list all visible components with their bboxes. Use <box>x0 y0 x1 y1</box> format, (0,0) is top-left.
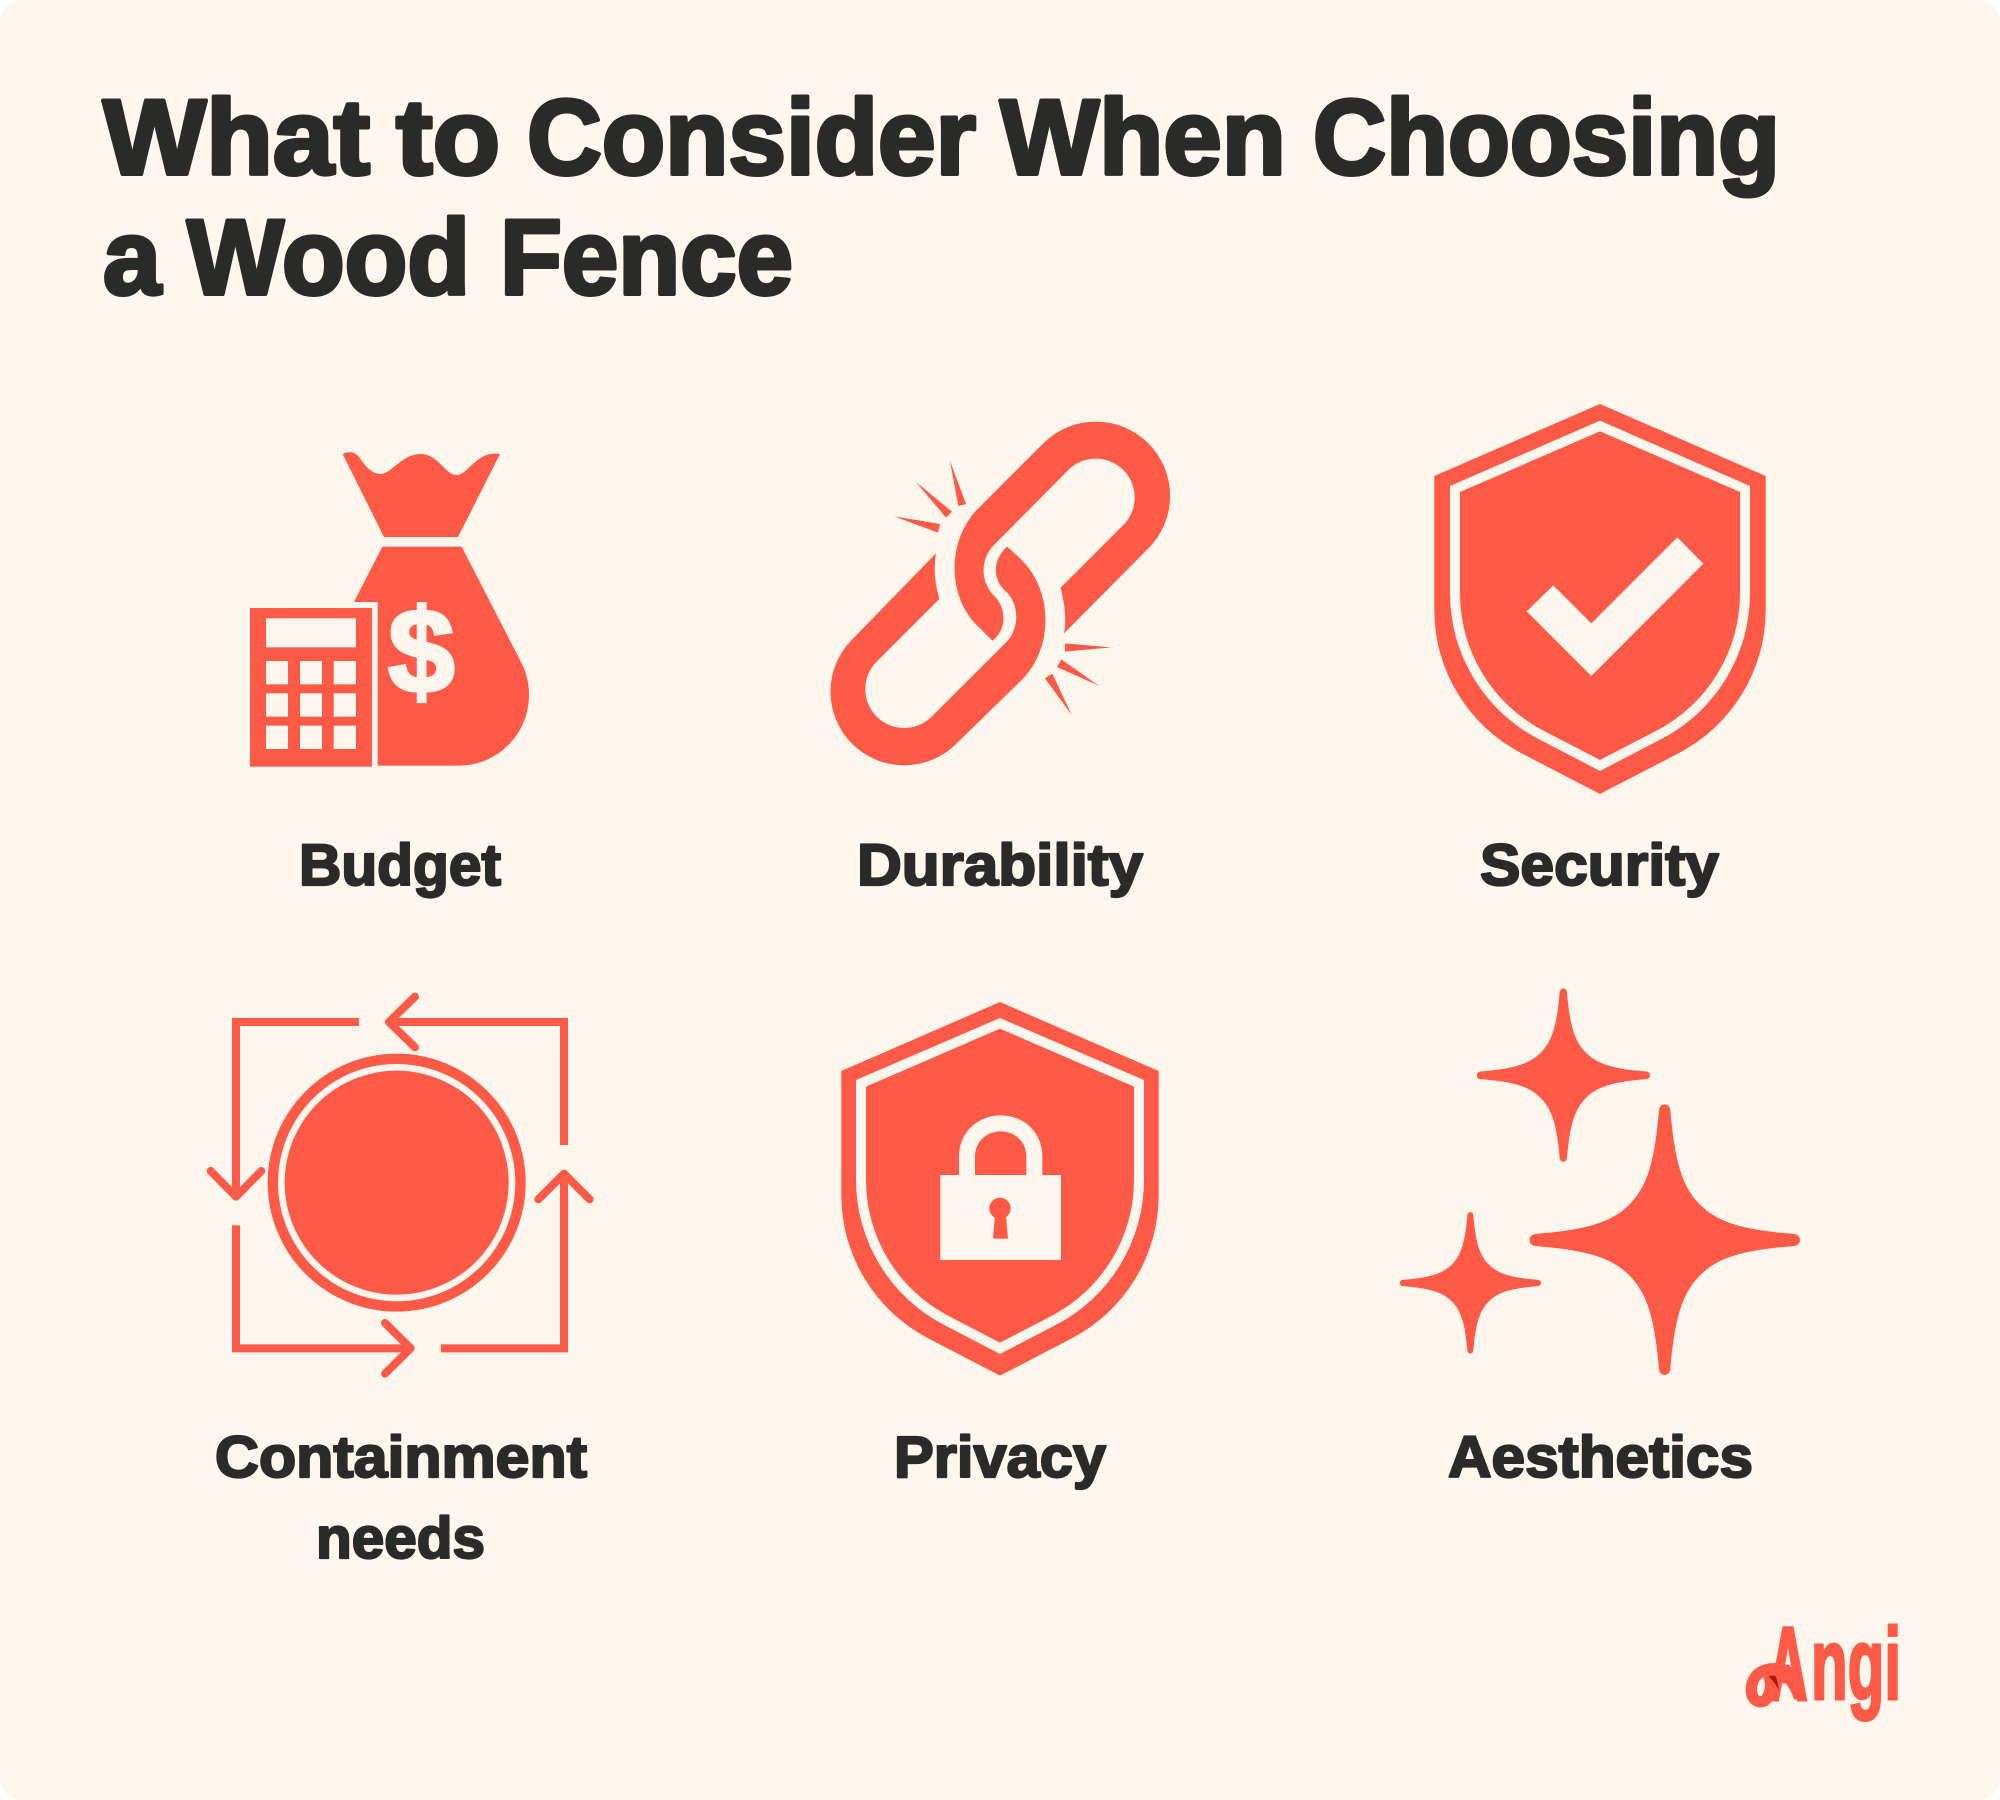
label: Containment needs: needs <box>316 1506 485 1571</box>
icon: shield with padlock <box>841 1002 1159 1376</box>
title: Fence <box>500 197 793 317</box>
icon: sparkles <box>1400 989 1800 1375</box>
title: Consider <box>527 77 976 197</box>
title: When <box>1000 77 1286 197</box>
title: Wood <box>187 197 470 317</box>
label: Security: Security <box>1480 833 1719 898</box>
icon: shield with check mark <box>1434 404 1766 794</box>
title: What <box>103 77 370 197</box>
title: a <box>103 197 162 317</box>
label: Budget: Budget <box>299 833 501 898</box>
label: Containment needs: Containment <box>215 1425 587 1490</box>
title: Choosing <box>1313 77 1780 197</box>
title <box>103 77 1780 317</box>
icon: circle with surrounding arrows <box>211 997 590 1374</box>
title: to <box>396 77 500 197</box>
label: Containment needs <box>215 1425 587 1571</box>
icon: broken chain link <box>831 422 1170 765</box>
logo: Angi <box>1751 1607 1901 1721</box>
label: Durability: Durability <box>857 833 1143 898</box>
icon: money bag and calculator <box>250 452 529 767</box>
icon: money bag and calculator: $ <box>388 585 455 719</box>
label: Privacy: Privacy <box>894 1425 1106 1490</box>
label: Aesthetics: Aesthetics <box>1448 1425 1753 1490</box>
logo: Angi: ngi <box>1811 1607 1901 1721</box>
logo: Angi: A <box>1769 1607 1807 1721</box>
